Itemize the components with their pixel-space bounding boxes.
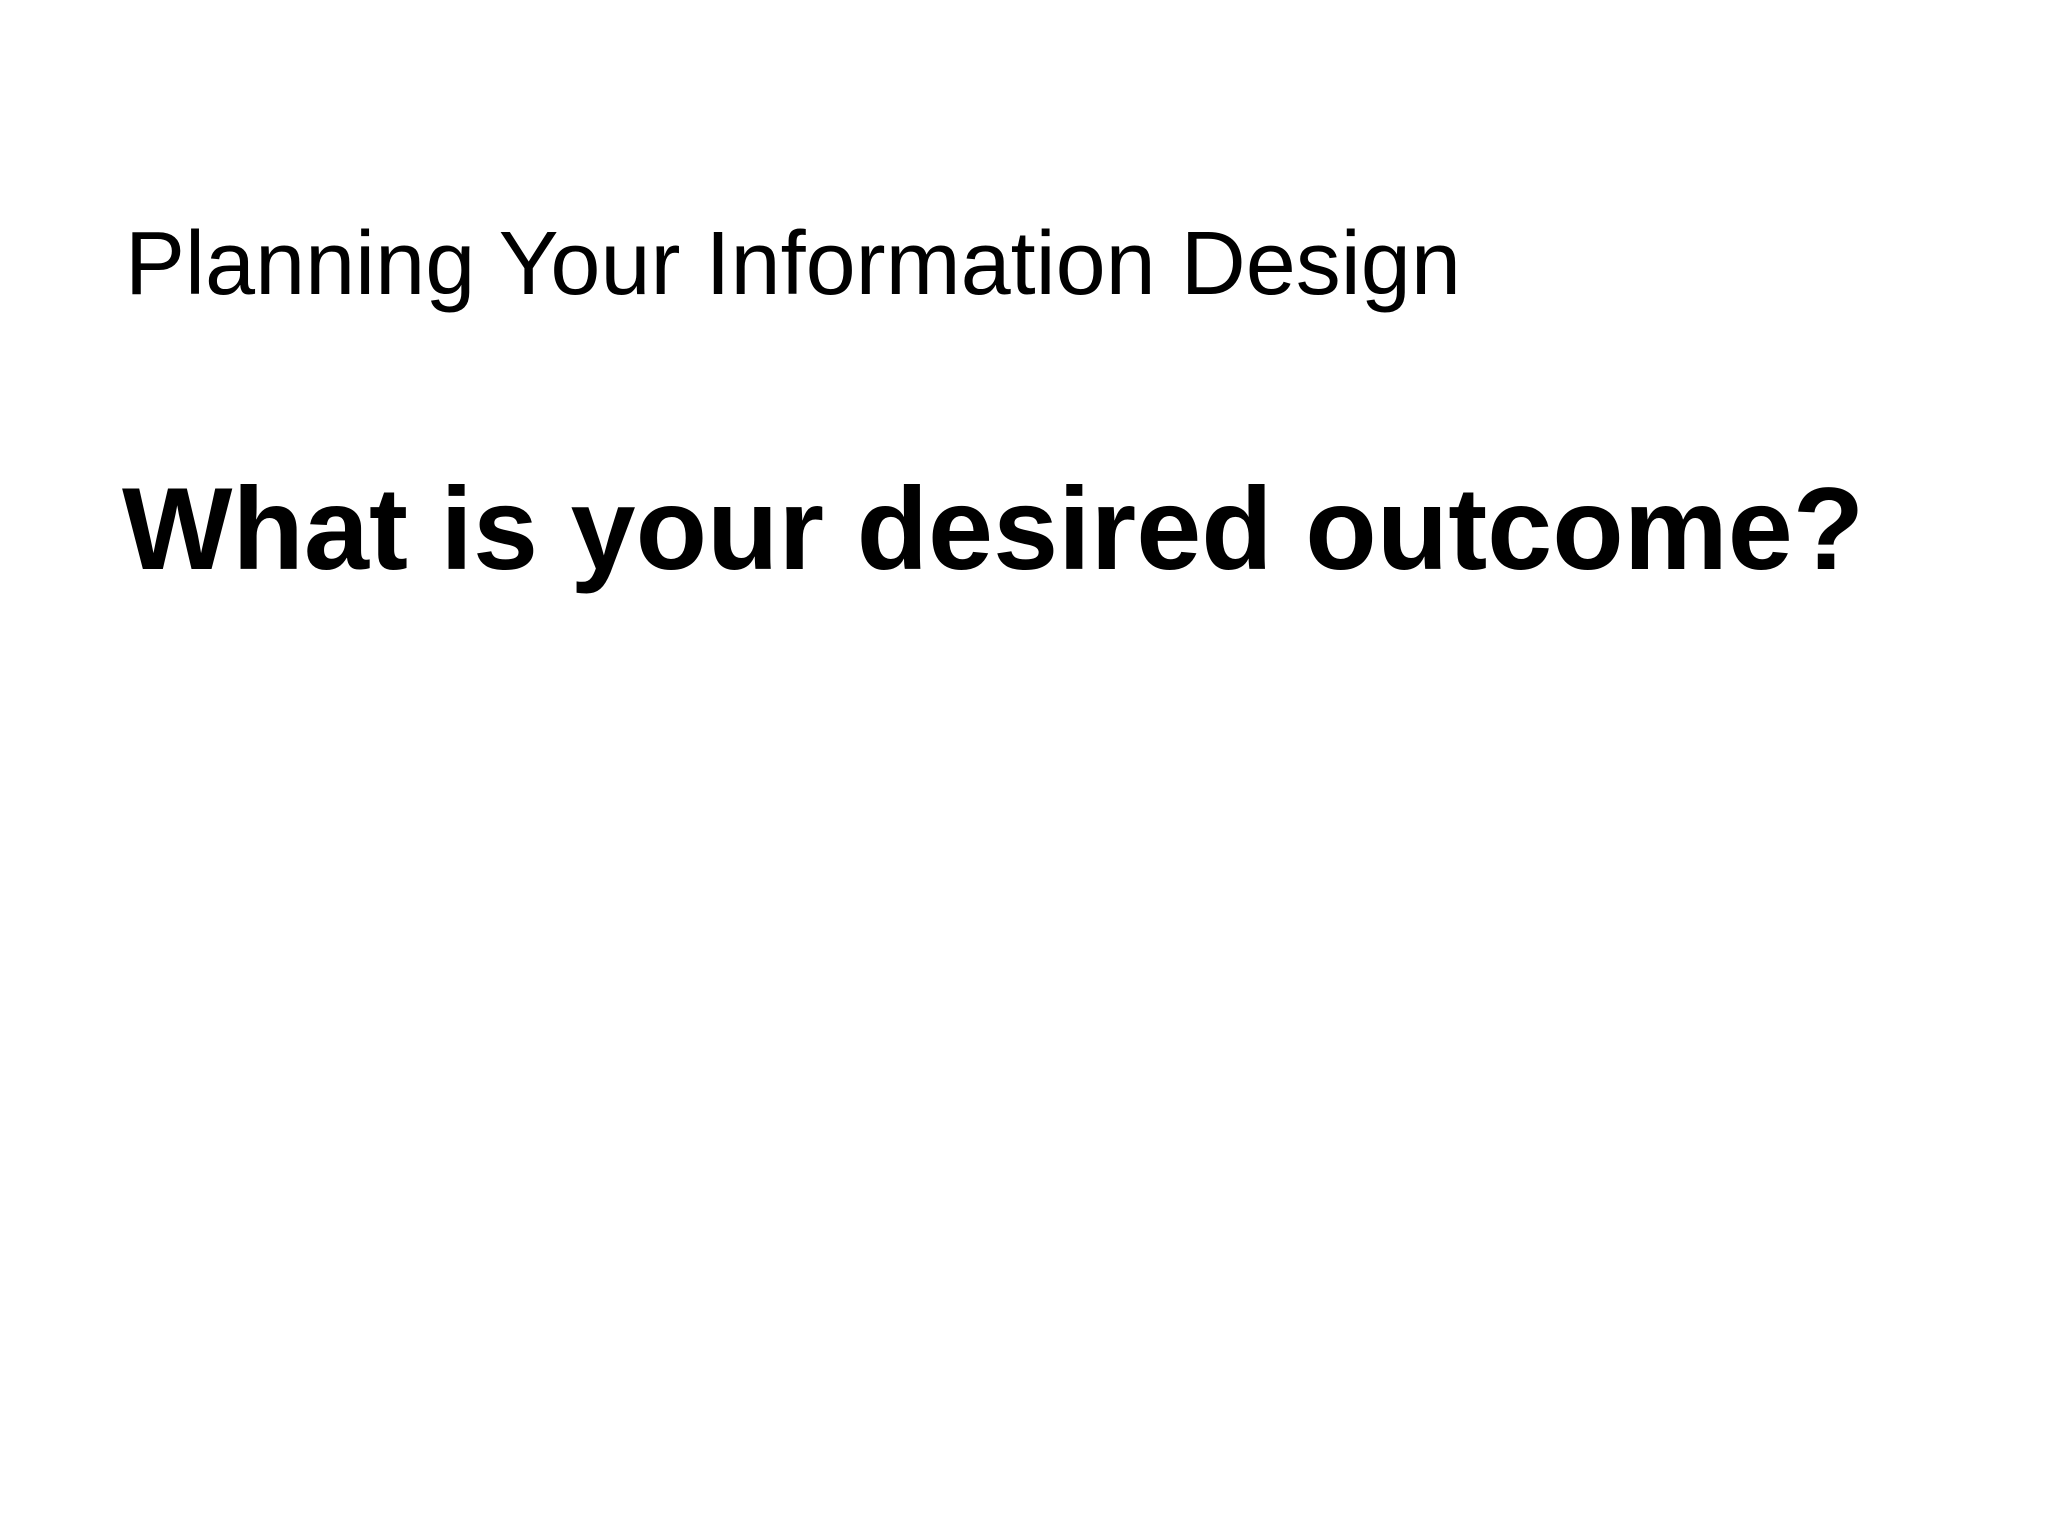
title: Planning Your Information Design bbox=[125, 214, 1461, 314]
heading: question: What is your desired outcome? bbox=[122, 463, 1864, 594]
